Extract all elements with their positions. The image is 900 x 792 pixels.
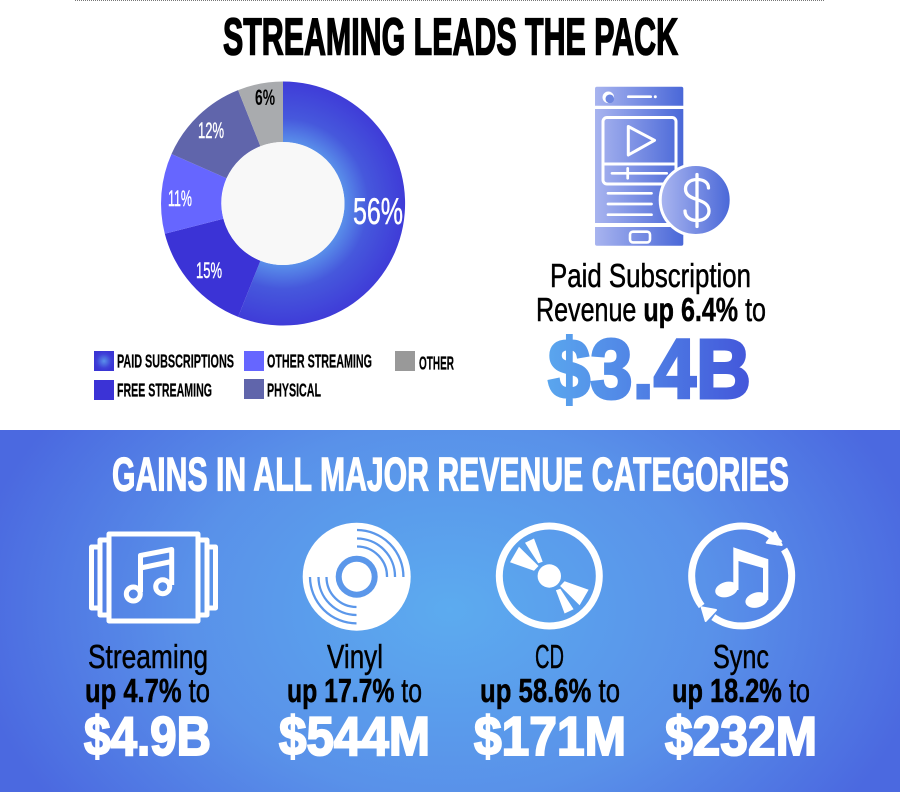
icon: cd [499,526,599,626]
donut chart: 56% [353,191,403,232]
icon: streaming album stack [92,534,216,621]
paid subscription revenue text: Revenue up 6.4% to [536,291,766,328]
legend: OTHER [419,354,454,374]
stat: vinyl: up 17.7% to [287,672,422,709]
stat: vinyl [279,638,430,767]
panel: revenue categories [0,430,900,792]
stat: sync: $232M [665,705,817,767]
paid subscription revenue text: Paid Subscription [550,257,751,294]
stat: cd [474,638,626,767]
legend: PAID SUBSCRIPTIONS [117,352,234,372]
icon: vinyl record [303,523,411,631]
donut chart: 11% [168,186,192,211]
stat: streaming: Streaming [88,638,208,675]
stat: sync [665,638,817,767]
stat: streaming: up 4.7% to [85,672,210,709]
stat: sync: up 18.2% to [672,672,810,709]
stat: cd: CD [535,638,564,675]
donut chart [161,81,405,325]
legend: OTHER STREAMING [267,352,372,372]
stat: streaming: $4.9B [84,705,211,767]
stat: vinyl: Vinyl [327,638,383,675]
stat: cd: up 58.6% to [480,672,620,709]
paid subscription revenue text [536,257,766,416]
donut chart: 12% [198,118,224,143]
legend: FREE STREAMING [117,380,212,400]
paid subscription revenue text: $3.4B [548,322,751,416]
legend [94,351,454,400]
stat: vinyl: $544M [279,705,430,767]
stat: cd: $171M [474,705,626,767]
stat: streaming [84,638,211,767]
legend: PHYSICAL [267,380,321,400]
icon: phone with dollar coin [595,87,731,246]
stat: sync: Sync [713,638,769,675]
top dotted rule [75,0,825,2]
donut chart: 6% [255,85,275,110]
icon: sync note [692,526,792,626]
donut chart: 15% [196,258,222,283]
